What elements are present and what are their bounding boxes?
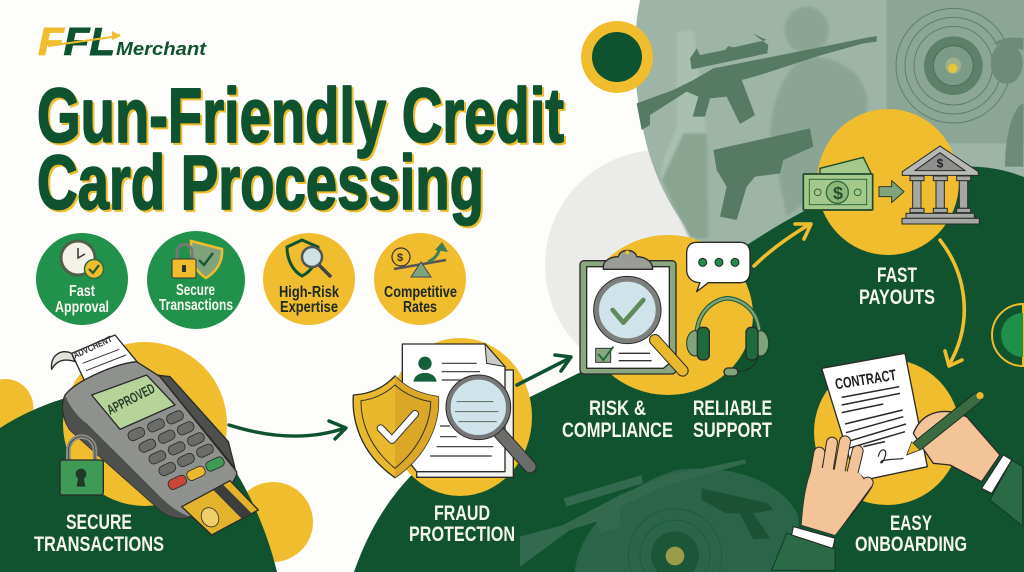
label: secure transactions: SECURE <box>66 511 132 534</box>
label: easy onboarding <box>855 512 967 556</box>
badge: competitive rates: Rates <box>403 299 437 316</box>
label: fraud protection: FRAUD <box>434 502 490 525</box>
cash <box>803 157 873 210</box>
padlock <box>60 437 103 495</box>
right hand and pen <box>907 392 1023 526</box>
arrow: payouts to onboarding <box>940 240 964 366</box>
title: Gun-Friendly Credit <box>37 73 564 159</box>
photo panel: shooting range silhouettes <box>635 0 1024 250</box>
label: risk & compliance: COMPLIANCE <box>562 419 673 442</box>
bank <box>902 146 979 224</box>
icon: document, shield and magnifier <box>353 344 530 478</box>
yellow circle: risk <box>583 235 753 395</box>
contract: CONTRACT <box>834 367 898 393</box>
checkbox and lines <box>596 347 652 362</box>
receipt: ADVCHENT <box>72 334 114 360</box>
badge: secure transactions <box>147 231 245 329</box>
background grey circle <box>545 150 775 380</box>
faded firearm silhouettes on green <box>520 459 800 572</box>
dark green hill left <box>0 386 277 572</box>
logo: FFL <box>38 21 115 64</box>
yellow circle: fraud <box>388 338 532 496</box>
badge: fast approval: Approval <box>55 299 109 316</box>
icon: lock and shield <box>172 241 222 278</box>
magnifier <box>446 375 530 467</box>
contract <box>822 353 927 482</box>
badge: secure transactions: Transactions <box>159 297 233 314</box>
screen <box>92 375 175 429</box>
yellow circle: payouts <box>817 109 959 255</box>
arrow: support to payouts <box>754 224 811 266</box>
title <box>37 73 564 226</box>
decorative top circle <box>581 21 653 93</box>
icon: headset <box>687 298 769 376</box>
label: risk & compliance <box>562 397 673 442</box>
logo: Merchant <box>116 39 207 59</box>
label: fast payouts: PAYOUTS <box>859 286 935 309</box>
icon: speech bubble <box>687 242 750 292</box>
yellow circle: terminal <box>63 342 227 506</box>
icon: contract and signing hands <box>772 353 1023 570</box>
arrow: terminal to fraud <box>229 421 346 439</box>
label: easy onboarding: ONBOARDING <box>855 533 967 556</box>
left hand <box>772 441 873 570</box>
title: Card Processing <box>37 140 484 226</box>
label: easy onboarding: EASY <box>890 512 932 535</box>
label: reliable support <box>693 397 772 442</box>
badge: high-risk expertise: Expertise <box>280 299 338 316</box>
shield <box>353 376 439 478</box>
card <box>182 481 258 535</box>
badge: high-risk expertise: High-Risk <box>279 284 339 301</box>
label: fast payouts: FAST <box>877 264 917 287</box>
bank: $ <box>937 157 944 171</box>
badge: competitive rates <box>374 233 466 325</box>
small arrow <box>879 181 904 203</box>
badge: fast approval <box>36 233 128 325</box>
cash: $ <box>833 183 843 203</box>
keypad <box>126 409 226 491</box>
icon: shield and magnifier <box>287 240 331 277</box>
label: reliable support: SUPPORT <box>693 419 772 442</box>
badge: competitive rates: Competitive <box>384 284 457 301</box>
dark green main hill <box>354 167 1024 572</box>
label: risk & compliance: RISK & <box>589 397 646 420</box>
decorative right edge circle <box>992 304 1023 366</box>
magnifier <box>594 276 683 371</box>
label: fraud protection: PROTECTION <box>409 523 515 546</box>
label: secure transactions: TRANSACTIONS <box>34 533 164 556</box>
label: fast payouts <box>859 264 935 309</box>
label: secure transactions <box>34 511 164 556</box>
arrow: fraud to risk <box>517 355 571 385</box>
label: fraud protection <box>409 502 515 546</box>
icon: rifle silhouette <box>637 33 877 130</box>
logo <box>38 21 207 64</box>
icon: clipboard with magnifier <box>580 250 683 374</box>
badge: secure transactions: Secure <box>176 282 215 299</box>
document <box>402 344 513 477</box>
badge: fast approval: Fast <box>69 283 96 300</box>
receipt <box>52 334 138 387</box>
icon: balance scale with coin and arrow: $ <box>397 252 403 264</box>
icon: money and bank <box>803 146 979 224</box>
yellow circle behind left scene <box>0 379 33 435</box>
icon: payment terminal <box>52 334 258 535</box>
screen: APPROVED <box>104 380 157 418</box>
yellow circle lower left <box>233 482 313 562</box>
badge: high-risk expertise <box>263 233 355 325</box>
yellow circle: onboarding <box>814 359 960 505</box>
label: reliable support: RELIABLE <box>693 397 772 420</box>
icon: clock with check <box>61 241 104 278</box>
icon: pistol silhouette <box>713 128 813 220</box>
